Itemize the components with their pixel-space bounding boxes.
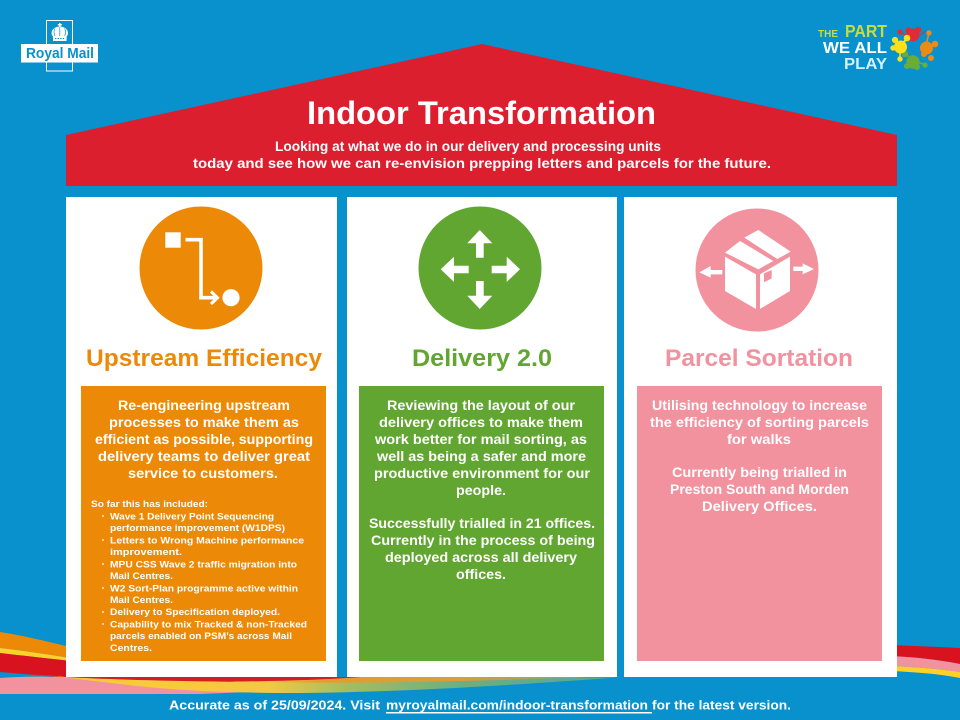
text box: productive environment for our — [374, 466, 591, 481]
icon: puzzle ring — [891, 27, 938, 70]
The Part We All Play logo: THE — [818, 29, 838, 40]
footer note: Accurate as of 25/09/2024. Visit — [169, 698, 381, 712]
achievements list: Letters to Wrong Machine performance — [110, 536, 304, 546]
heading: Delivery 2.0 — [412, 345, 552, 372]
text box: Preston South and Morden — [670, 482, 849, 497]
achievements list: improvement. — [110, 547, 182, 558]
text box: efficient as possible, supporting — [95, 432, 313, 447]
icon: parcel box with arrows — [696, 208, 818, 332]
footer note — [169, 698, 791, 714]
text box: Re-engineering upstream — [118, 398, 290, 413]
text box: the efficiency of sorting parcels — [650, 415, 869, 430]
heading: Upstream Efficiency — [86, 345, 323, 372]
text box: work better for mail sorting, as — [374, 432, 587, 447]
panel: Delivery 2.0 — [347, 197, 617, 677]
text box: Currently being trialled in — [672, 465, 847, 480]
achievements list: parcels enabled on PSM’s across Mail — [110, 631, 292, 642]
left ribbon swoosh — [0, 632, 617, 694]
text box: Delivery Offices. — [702, 499, 817, 514]
panel: Upstream Efficiency — [66, 197, 337, 677]
achievements list: MPU CSS Wave 2 traffic migration into — [110, 560, 297, 570]
heading: Parcel Sortation — [665, 345, 853, 372]
text box: well as being a safer and more — [376, 449, 587, 464]
achievements list: Delivery to Specification deployed. — [110, 607, 280, 618]
title: Indoor Transformation — [307, 95, 656, 131]
achievements list: Wave 1 Delivery Point Sequencing — [110, 512, 274, 522]
icon: four arrows — [418, 206, 542, 330]
text box: Utilising technology to increase — [652, 398, 868, 413]
icon: crown — [52, 23, 68, 41]
achievements list: So far this has included: — [91, 499, 208, 510]
achievements list: W2 Sort-Plan programme active within — [110, 584, 298, 594]
footer note: for the latest version. — [652, 698, 791, 712]
icon: process flow — [140, 206, 262, 330]
text box: deployed across all delivery — [385, 550, 578, 565]
text box: offices. — [456, 567, 506, 582]
The Part We All Play logo: WE ALL — [823, 40, 887, 57]
The Part We All Play logo: PLAY — [844, 56, 887, 73]
achievements list: Capability to mix Tracked & non-Tracked — [110, 620, 307, 630]
text box: Reviewing the layout of our — [387, 398, 576, 413]
text box — [81, 386, 326, 661]
text box: Successfully trialled in 21 offices. — [369, 516, 595, 531]
The Part We All Play logo — [818, 21, 938, 73]
Royal Mail logo: Royal Mail — [26, 46, 94, 62]
text box: service to customers. — [128, 466, 278, 481]
text box — [637, 386, 882, 661]
text box: people. — [456, 483, 506, 498]
text box — [359, 386, 604, 661]
subtitle — [193, 139, 771, 171]
house roof banner — [66, 44, 897, 186]
footer note: myroyalmail.com/indoor-transformation — [386, 698, 648, 712]
text box: Currently in the process of being — [371, 533, 595, 548]
The Part We All Play logo: PART — [845, 21, 887, 41]
subtitle: today and see how we can re-envision prepping letters and parcels for the future. — [193, 156, 771, 171]
achievements list: performance improvement (W1DPS) — [110, 523, 285, 534]
text box: processes to make them as — [109, 415, 299, 430]
achievements list: Centres. — [110, 643, 152, 654]
text box: delivery offices to make them — [379, 415, 583, 430]
Royal Mail logo — [21, 20, 98, 71]
achievements list: Mail Centres. — [110, 595, 173, 606]
subtitle: Looking at what we do in our delivery and processing units — [275, 139, 661, 154]
text box: delivery teams to deliver great — [98, 449, 311, 464]
text box: for walks — [727, 432, 791, 447]
achievements list: Mail Centres. — [110, 571, 173, 582]
achievements list — [91, 499, 307, 654]
right ribbon swoosh — [890, 645, 960, 678]
panel: Parcel Sortation — [624, 197, 897, 677]
